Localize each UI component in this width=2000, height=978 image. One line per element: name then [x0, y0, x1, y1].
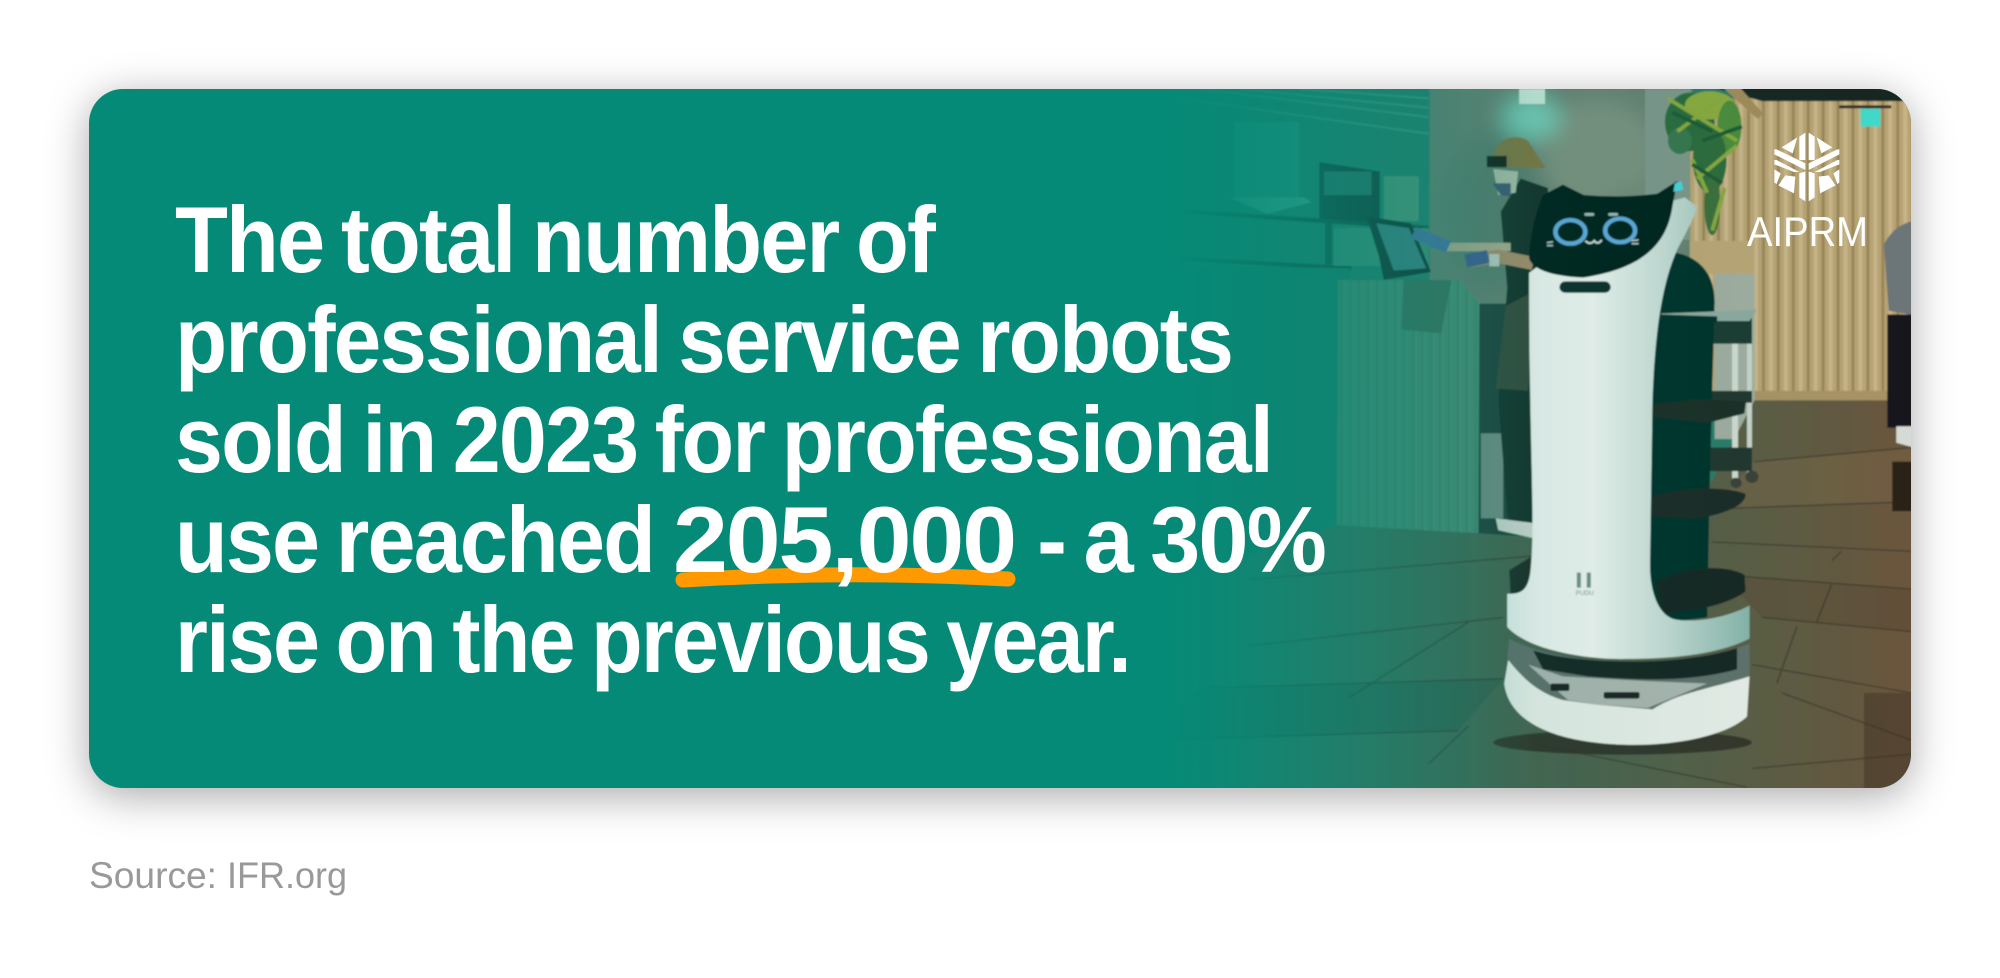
headline: rise on the previous year. [175, 587, 1130, 692]
highlight underline [683, 575, 1008, 580]
serving cart [1710, 318, 1758, 488]
photo: service robot in restaurant [1211, 89, 1911, 788]
headline [175, 187, 1325, 692]
headline: - a 30% [1037, 487, 1325, 592]
point of sale monitor [1366, 216, 1431, 280]
robot rear column and trays [1509, 252, 1757, 622]
person at right edge [1884, 221, 1915, 511]
teal gradient overlay [1162, 89, 1697, 788]
wood slat wall [1690, 87, 1914, 400]
robot foot [1504, 660, 1749, 745]
desk behind robot [1690, 241, 1754, 439]
source note [89, 855, 347, 896]
headline: sold in 2023 for professional [175, 387, 1272, 492]
back wall left [1231, 89, 1429, 270]
plant [1665, 91, 1742, 235]
headline: 205,000 [673, 487, 1015, 592]
logo hexagon mark [1774, 133, 1839, 201]
headline: use reached [175, 487, 654, 592]
panel: green card [89, 89, 1911, 788]
robot head [1529, 181, 1683, 278]
robot brand mark: PUDU [1576, 590, 1594, 597]
robot brand mark [1576, 573, 1594, 597]
headline: The total number of [175, 187, 936, 292]
staff member [1414, 137, 1548, 538]
robot [1504, 181, 1757, 745]
robot white body [1507, 197, 1749, 659]
robot sensor band [1507, 639, 1749, 709]
stone pillar [1428, 89, 1693, 342]
source note: Source: [89, 855, 217, 896]
floor [1256, 400, 1911, 788]
wooden counter [1324, 268, 1524, 537]
source note: IFR.org [227, 855, 347, 896]
head slot [1559, 281, 1611, 293]
headline: professional service robots [175, 287, 1232, 392]
logo: AIPRM [1747, 133, 1868, 255]
logo wordmark: AIPRM [1747, 208, 1868, 255]
